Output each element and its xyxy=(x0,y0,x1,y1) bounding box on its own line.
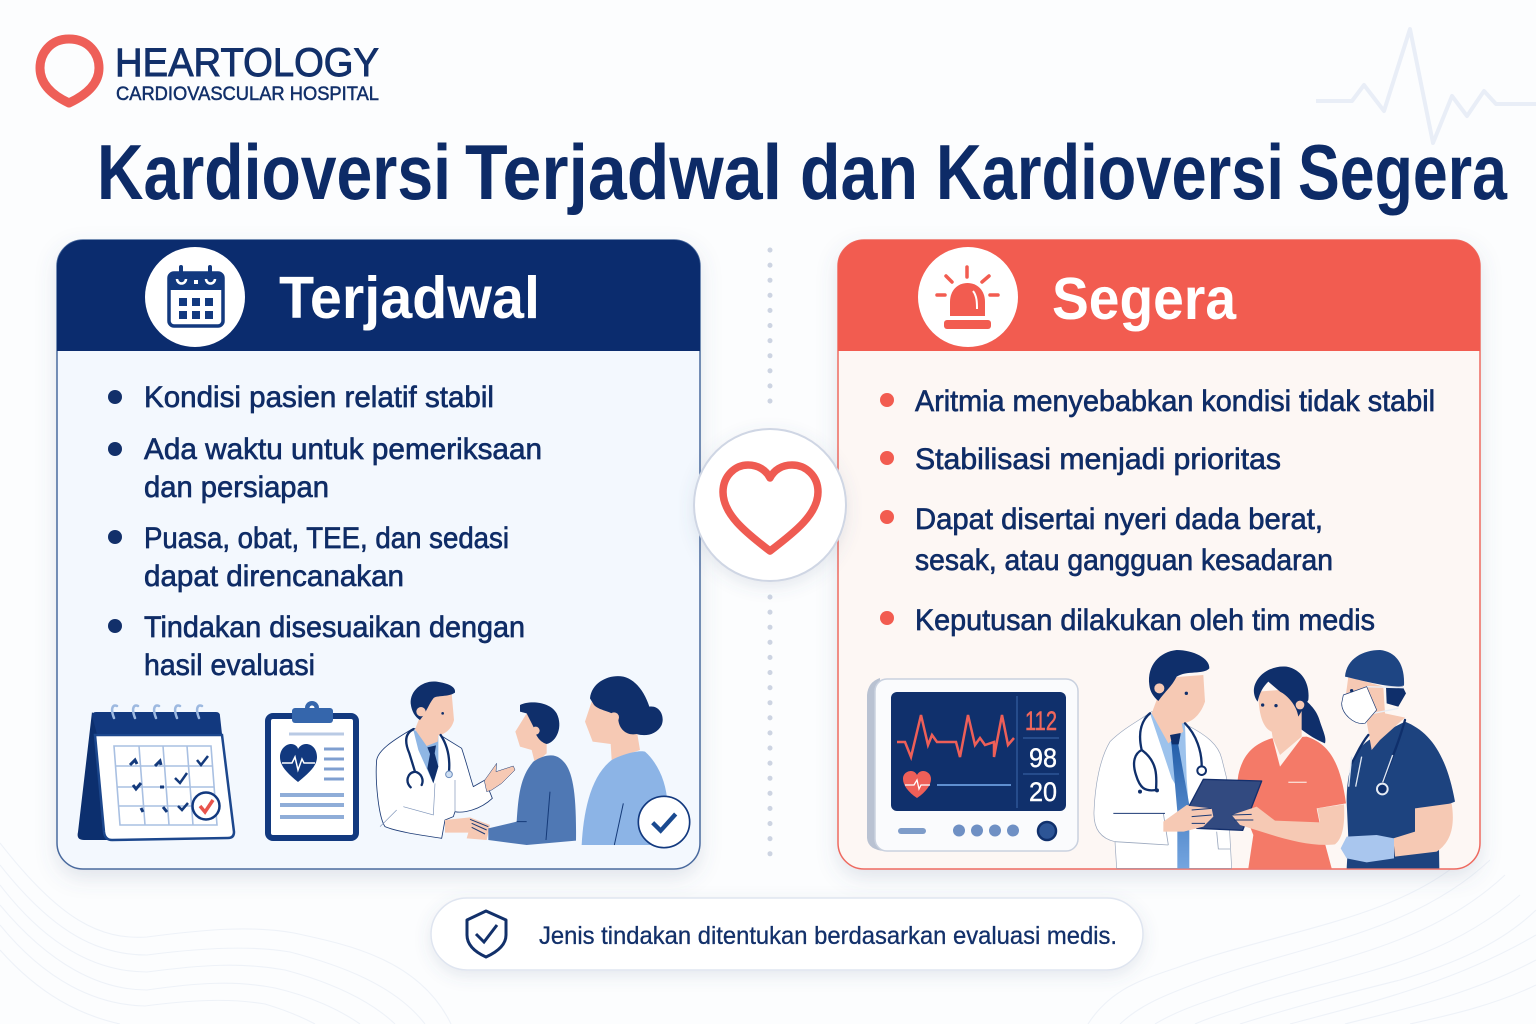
illustration: patient monitor: 98 xyxy=(1029,743,1057,773)
footer text: Jenis tindakan ditentukan berdasarkan evaluasi medis. xyxy=(539,922,1117,950)
bullet list: Segera: Stabilisasi menjadi prioritas xyxy=(915,443,1281,476)
illustration: medical team xyxy=(1094,650,1455,868)
illustration: patient monitor: 20 xyxy=(1029,777,1057,807)
footer note xyxy=(431,898,1143,970)
surgeon xyxy=(1341,650,1455,868)
panel: Terjadwal xyxy=(57,240,700,869)
bullet list: Terjadwal: Tindakan disesuaikan dengan xyxy=(144,611,525,644)
doctor xyxy=(376,681,515,840)
nurse xyxy=(1233,666,1346,868)
brand name: HEARTOLOGY xyxy=(115,41,379,85)
icon: calendar xyxy=(145,247,245,347)
brand subtitle: CARDIOVASCULAR HOSPITAL xyxy=(116,83,379,105)
bullet list: Terjadwal: hasil evaluasi xyxy=(144,649,315,682)
bullet list: Terjadwal: Kondisi pasien relatif stabil xyxy=(144,381,494,414)
illustration: patient monitor: 112 xyxy=(1025,706,1057,736)
bullet list: Terjadwal: dapat direncanakan xyxy=(144,560,404,593)
patient xyxy=(488,702,576,845)
illustration: desk calendar xyxy=(78,706,234,840)
bullet list: Segera: Keputusan dilakukan oleh tim medis xyxy=(915,604,1375,637)
panel heading: Terjadwal: Terjadwal xyxy=(279,265,540,331)
panel header: Terjadwal xyxy=(57,240,700,351)
bullet list: Terjadwal: Puasa, obat, TEE, dan sedasi xyxy=(144,522,509,555)
logo xyxy=(40,39,379,105)
title: Terjadwal xyxy=(465,128,782,216)
check badge xyxy=(638,796,690,848)
title: Kardioversi xyxy=(936,128,1284,216)
illustration: clipboard xyxy=(268,701,356,838)
bullet list: Terjadwal: Ada waktu untuk pemeriksaan xyxy=(144,433,542,466)
panel: Segera xyxy=(838,240,1480,869)
tablet xyxy=(1189,779,1262,830)
logo mark xyxy=(40,39,99,103)
bullet list: Terjadwal: dan persiapan xyxy=(144,471,329,504)
illustration: patient monitor xyxy=(867,678,1078,851)
title: dan xyxy=(800,128,918,216)
panel heading: Segera: Segera xyxy=(1052,266,1237,332)
illustration: doctor and patients xyxy=(376,676,690,848)
hands xyxy=(1170,804,1344,845)
bullet list: Segera: sesak, atau gangguan kesadaran xyxy=(915,544,1333,577)
title: Kardioversi xyxy=(97,128,451,216)
icon: heart xyxy=(723,465,818,551)
icon: alarm siren xyxy=(918,247,1018,347)
center heart badge xyxy=(694,429,846,581)
bullet list: Segera xyxy=(880,385,1435,637)
doctor xyxy=(1094,650,1232,868)
woman xyxy=(582,676,667,845)
panel header: Segera xyxy=(838,240,1480,351)
icon: shield check xyxy=(467,911,506,957)
center dotted divider xyxy=(768,250,772,866)
bullet list: Terjadwal xyxy=(108,381,542,682)
bullet list: Segera: Dapat disertai nyeri dada berat, xyxy=(915,503,1323,536)
bullet list: Segera: Aritmia menyebabkan kondisi tidak stabil xyxy=(915,385,1435,418)
title xyxy=(97,128,1507,216)
background ECG line xyxy=(1316,29,1536,143)
